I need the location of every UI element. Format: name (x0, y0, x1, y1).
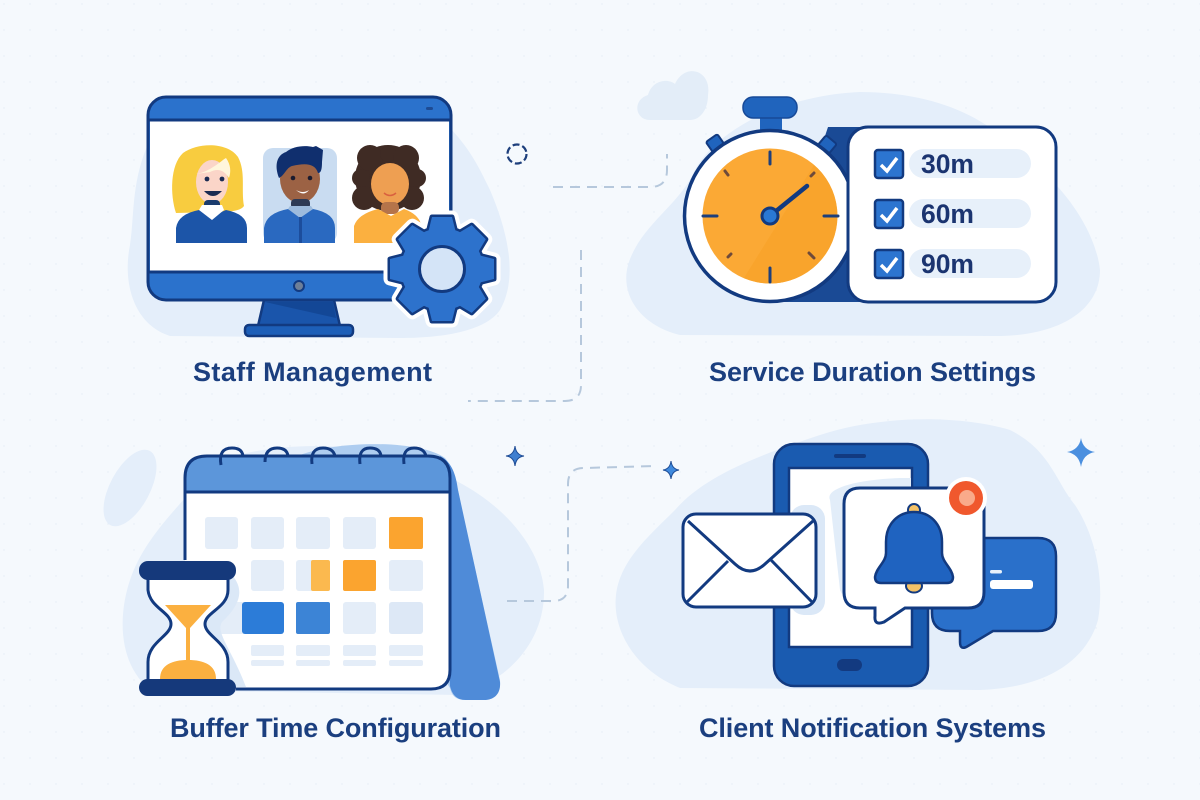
background blob: staff management (128, 130, 510, 338)
connector: dashed top (553, 154, 667, 187)
date grid (205, 517, 423, 666)
background streak: buffer time (93, 442, 167, 534)
connector: dashed bottom (507, 466, 656, 601)
avatar: man (263, 146, 337, 243)
avatar: curly-haired woman (352, 145, 426, 243)
monitor frame (148, 97, 451, 300)
hourglass (139, 561, 246, 696)
chat bubble (932, 538, 1056, 648)
heading: staff management: Staff Management (193, 357, 432, 387)
phone (774, 444, 928, 686)
option: 30m (875, 149, 1031, 179)
envelope halo (790, 505, 825, 615)
heading: client notifications: Client Notification Systems (699, 713, 1046, 743)
connector: dashed middle (468, 250, 581, 401)
navy backing (770, 127, 860, 302)
icon: sparkle middle (663, 461, 679, 479)
screen shadow (829, 478, 911, 606)
monitor stand (245, 300, 353, 336)
calendar back page (300, 444, 500, 700)
notification bubble (844, 477, 987, 623)
binder rings (220, 448, 426, 465)
stopwatch (684, 97, 856, 302)
icon: sparkle left (506, 446, 524, 466)
panel: service duration (684, 97, 1056, 302)
calendar (185, 448, 450, 689)
bell icon (875, 504, 953, 592)
background blob: service duration (626, 92, 1100, 336)
envelope (683, 514, 816, 607)
icon: settings gear (390, 217, 494, 321)
panel: staff management (148, 97, 494, 336)
icon: sparkle right (1067, 438, 1095, 467)
duration options card (848, 127, 1056, 302)
heading: service duration: Service Duration Settings (709, 357, 1036, 387)
notification badge (945, 477, 987, 519)
background blob: buffer time (123, 446, 544, 695)
option: 90m (875, 249, 1031, 279)
panel: buffer time (139, 444, 500, 700)
avatar: blonde woman (172, 145, 247, 243)
option: 60m (875, 199, 1031, 229)
icon: dashed ring (508, 144, 526, 164)
option: 60m: 60m (921, 199, 974, 229)
option: 30m: 30m (921, 149, 974, 179)
heading: buffer time: Buffer Time Configuration (170, 713, 501, 743)
calendar fold (440, 456, 500, 700)
panel: client notifications (683, 444, 1056, 686)
background cloud (637, 71, 708, 120)
background blob: client notifications (616, 419, 1100, 690)
option: 90m: 90m (921, 249, 974, 279)
